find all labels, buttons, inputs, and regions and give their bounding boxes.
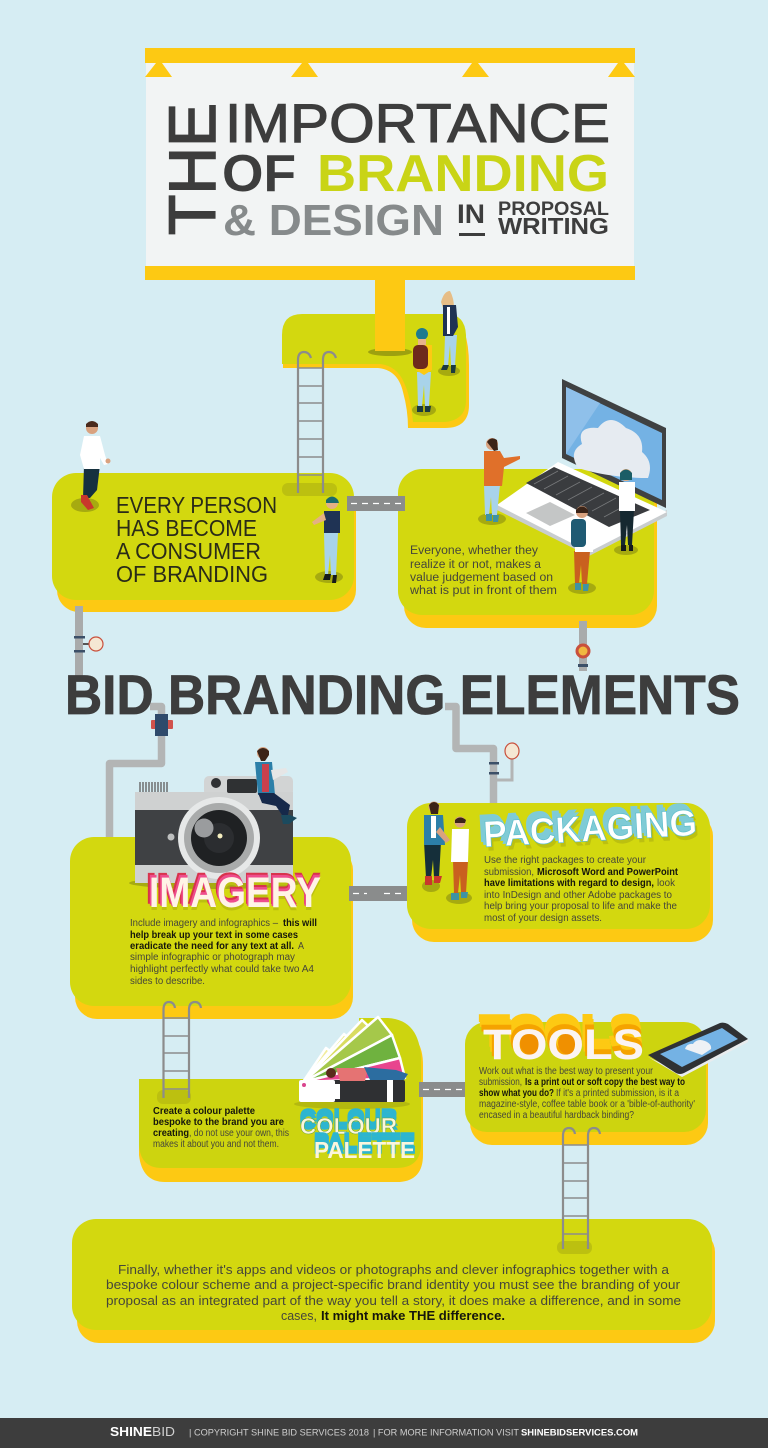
footer (0, 1418, 768, 1448)
text: tools: magazine-style, coffee table book or a 'bible-of-authority' (479, 1099, 695, 1110)
heading: colour palette: COLOUR (300, 1104, 397, 1130)
text: imagery: simple infographic or photograph may (130, 952, 295, 963)
text: tools: If it's a printed submission, is it a (556, 1088, 679, 1099)
footer: | COPYRIGHT SHINE BID SERVICES 2018 (189, 1428, 369, 1438)
road: top (347, 496, 405, 511)
title: WRITING (498, 213, 609, 239)
text: tools: Is a print out or soft copy the best way to (525, 1077, 685, 1088)
heading: colour palette: PALETTE (314, 1132, 415, 1158)
person: man in orange shirt (478, 438, 520, 525)
people: handshake (422, 802, 472, 904)
text: conclusion: It might make THE difference. (321, 1309, 505, 1323)
heading: colour palette: PALETTE (314, 1137, 415, 1163)
text: packaging: into InDesign and other Adobe packages to (484, 890, 672, 901)
text: colour palette: , do not use your own, this (189, 1128, 289, 1139)
text: value judgement: Everyone, whether they (410, 545, 538, 557)
text: conclusion (106, 1263, 681, 1323)
icon: tablet (648, 1023, 748, 1077)
text: conclusion: cases, (281, 1309, 317, 1323)
text: packaging: Microsoft Word and PowerPoint (537, 867, 679, 878)
heading: packaging: PACKAGING (480, 799, 696, 852)
icon: colour swatch fan (303, 1017, 405, 1082)
text: imagery: this will (283, 918, 317, 929)
text: value judgement: value judgement based on (410, 572, 553, 584)
text: conclusion: bespoke colour scheme and a project-specific brand identity you must see the branding of your (106, 1278, 680, 1292)
title: & DESIGN (223, 196, 444, 245)
text: packaging (484, 855, 679, 924)
text: tools (479, 1066, 695, 1121)
text: colour palette: Create a colour palette (153, 1106, 255, 1117)
text: packaging: help bring your proposal to life and make the (484, 901, 677, 912)
footer: SHINEBIDSERVICES.COM (521, 1428, 638, 1438)
panel: every person (52, 473, 356, 612)
panel: value judgement (398, 469, 657, 628)
icon: book with lying person (294, 1067, 410, 1109)
title: IN (457, 199, 485, 229)
heading: every person has become a consumer of branding: A CONSUMER (116, 538, 261, 564)
text: conclusion: Finally, whether it's apps and videos or photographs and clever infographics together with a (118, 1263, 669, 1277)
heading: imagery: IMAGERY (149, 869, 321, 917)
heading: tools: TOOLS (480, 1007, 641, 1055)
text: value judgement: what is put in front of them (409, 585, 557, 597)
title: THE (155, 103, 229, 235)
pipe: to packaging with gauge (445, 706, 519, 818)
text: value judgement (409, 545, 557, 597)
heading: tools: TOOLS (481, 1012, 642, 1060)
heading: colour palette: COLOUR (300, 1108, 397, 1134)
heading: imagery: IMAGERY (149, 872, 321, 920)
pipe: right with gauge (576, 621, 590, 671)
ladder: middle (164, 1002, 201, 1098)
text: colour palette (153, 1106, 289, 1150)
person: woman with teal hat (312, 496, 343, 583)
heading: imagery: IMAGERY (148, 867, 320, 915)
text: imagery: sides to describe. (130, 976, 205, 987)
text: colour palette: makes it about you and not them. (153, 1139, 279, 1150)
heading: every person has become a consumer of branding: HAS BECOME (116, 515, 257, 541)
heading: colour palette: PALETTE (314, 1128, 415, 1154)
text: imagery: A (298, 941, 304, 952)
heading: every person has become a consumer of branding (116, 492, 277, 587)
text: imagery: Include imagery and infographics – (130, 918, 278, 929)
road: lower (419, 1082, 465, 1097)
title (155, 92, 610, 245)
person: man sitting on camera (255, 747, 297, 824)
text: packaging: submission, (484, 867, 534, 878)
footer: | FOR MORE INFORMATION VISIT (373, 1428, 519, 1438)
ladder: bottom (563, 1128, 600, 1249)
text: imagery: highlight perfectly what could take two A4 (130, 964, 314, 975)
text: imagery: eradicate the need for any text at all. (130, 941, 294, 952)
text: packaging: have limitations with regard to design, (484, 878, 654, 889)
heading: every person has become a consumer of branding: OF BRANDING (116, 561, 268, 587)
panel: imagery (70, 837, 353, 1019)
person: man with glasses (71, 421, 110, 512)
text: packaging: look (657, 878, 676, 889)
text: packaging: Use the right packages to create your (484, 855, 647, 866)
panel: tools (465, 1022, 708, 1145)
footer: SHINE (110, 1424, 152, 1439)
panel: packaging (407, 803, 713, 942)
person: blonde woman (438, 291, 460, 376)
icon: camera (129, 776, 301, 889)
person: backpack student (412, 328, 436, 416)
heading: tools: TOOLS (483, 1021, 644, 1069)
heading: imagery: IMAGERY (146, 865, 320, 913)
panel: top platform (282, 314, 469, 428)
heading: tools: TOOLS (482, 1017, 643, 1065)
icon: laptop (497, 379, 667, 556)
ladder: top (298, 352, 336, 493)
text: packaging: most of your design assets. (484, 913, 602, 924)
text: colour palette: bespoke to the brand you are (153, 1117, 284, 1128)
title: OF (222, 145, 296, 203)
billboard (145, 48, 635, 356)
road: middle (349, 886, 407, 901)
text: imagery (130, 918, 317, 987)
text: value judgement: realize it or not, makes a (410, 559, 542, 571)
text: imagery: help break up your text in some cases (130, 930, 298, 941)
heading: colour palette (300, 1104, 415, 1163)
heading: tools (480, 1007, 644, 1069)
text: tools: Work out what is the best way to present your (479, 1066, 654, 1077)
text: colour palette: creating (153, 1128, 189, 1139)
text: tools: encased in a beautiful hardback binding? (479, 1110, 634, 1121)
heading: colour palette: COLOUR (300, 1113, 397, 1139)
title: IMPORTANCE (225, 92, 610, 154)
panel: conclusion (72, 1219, 715, 1343)
heading: packaging: PACKAGING (478, 796, 694, 849)
panel: colour palette (139, 1018, 423, 1182)
footer: BID (152, 1424, 175, 1439)
heading: packaging: PACKAGING (484, 806, 700, 859)
text: tools: submission, (479, 1077, 522, 1088)
person: man with blue backpack (568, 506, 596, 594)
text: conclusion: proposal as an integrated part of the way you tell a story, it does make a difference, and in some (106, 1294, 681, 1308)
pipe: left with gauge (74, 606, 103, 676)
heading: every person has become a consumer of branding: EVERY PERSON (116, 492, 277, 518)
pipe: to imagery with valve (104, 706, 173, 850)
heading: packaging: PACKAGING (482, 802, 698, 855)
person: woman at laptop (614, 469, 638, 555)
title: PROPOSAL (498, 198, 609, 220)
text: tools: show what you do? (479, 1088, 554, 1099)
title: BRANDING (317, 145, 609, 203)
